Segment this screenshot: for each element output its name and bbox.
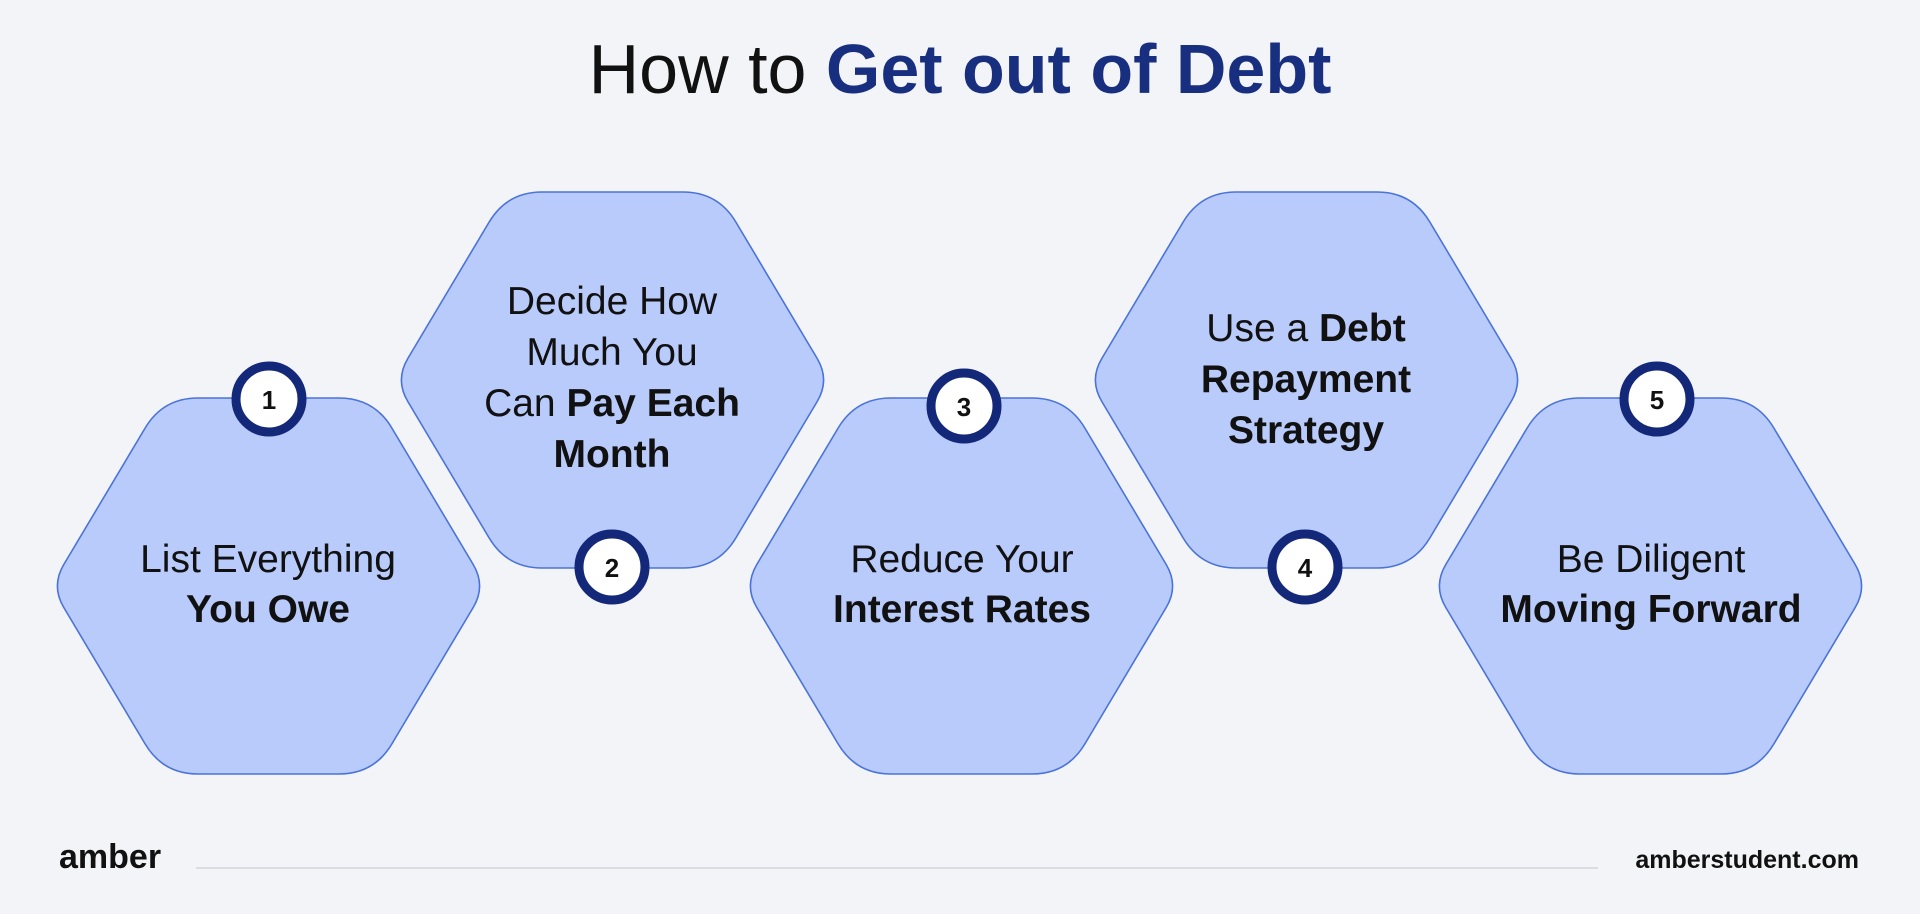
badge: 3: 3 (957, 392, 971, 422)
footer logo: amber (59, 838, 161, 876)
panel: step 5 (1439, 366, 1862, 774)
title: How to Get out of Debt (589, 30, 1331, 108)
text: step 2: Much You (526, 331, 698, 374)
badge: 2 (579, 534, 645, 600)
badge: 5: 5 (1650, 385, 1664, 415)
text: step 4: Use a Debt (1206, 307, 1406, 350)
text: step 1: You Owe (186, 588, 350, 631)
text: step 4: Repayment (1201, 358, 1411, 401)
badge: 4: 4 (1298, 553, 1313, 583)
badge: 1: 1 (262, 385, 276, 415)
panel: step 2 (401, 192, 824, 600)
text: step 5: Moving Forward (1500, 588, 1802, 631)
badge: 4 (1272, 534, 1338, 600)
text: step 3: Reduce Your (850, 538, 1074, 581)
panel: step 3 (750, 373, 1173, 774)
text: step 5: Be Diligent (1557, 538, 1745, 581)
text: step 2: Month (554, 433, 670, 476)
panel: step 1 (57, 366, 480, 774)
text: step 1: List Everything (140, 538, 396, 581)
footer url: amberstudent.com (1635, 846, 1859, 874)
text: step 2: Decide How (507, 280, 717, 323)
panel: step 4 (1095, 192, 1518, 600)
text: step 2: Can Pay Each (484, 382, 740, 425)
badge: 3 (931, 373, 997, 439)
text: step 3: Interest Rates (833, 588, 1091, 631)
badge: 5 (1624, 366, 1690, 432)
badge: 1 (236, 366, 302, 432)
badge: 2: 2 (605, 553, 619, 583)
text: step 4: Strategy (1228, 409, 1384, 452)
